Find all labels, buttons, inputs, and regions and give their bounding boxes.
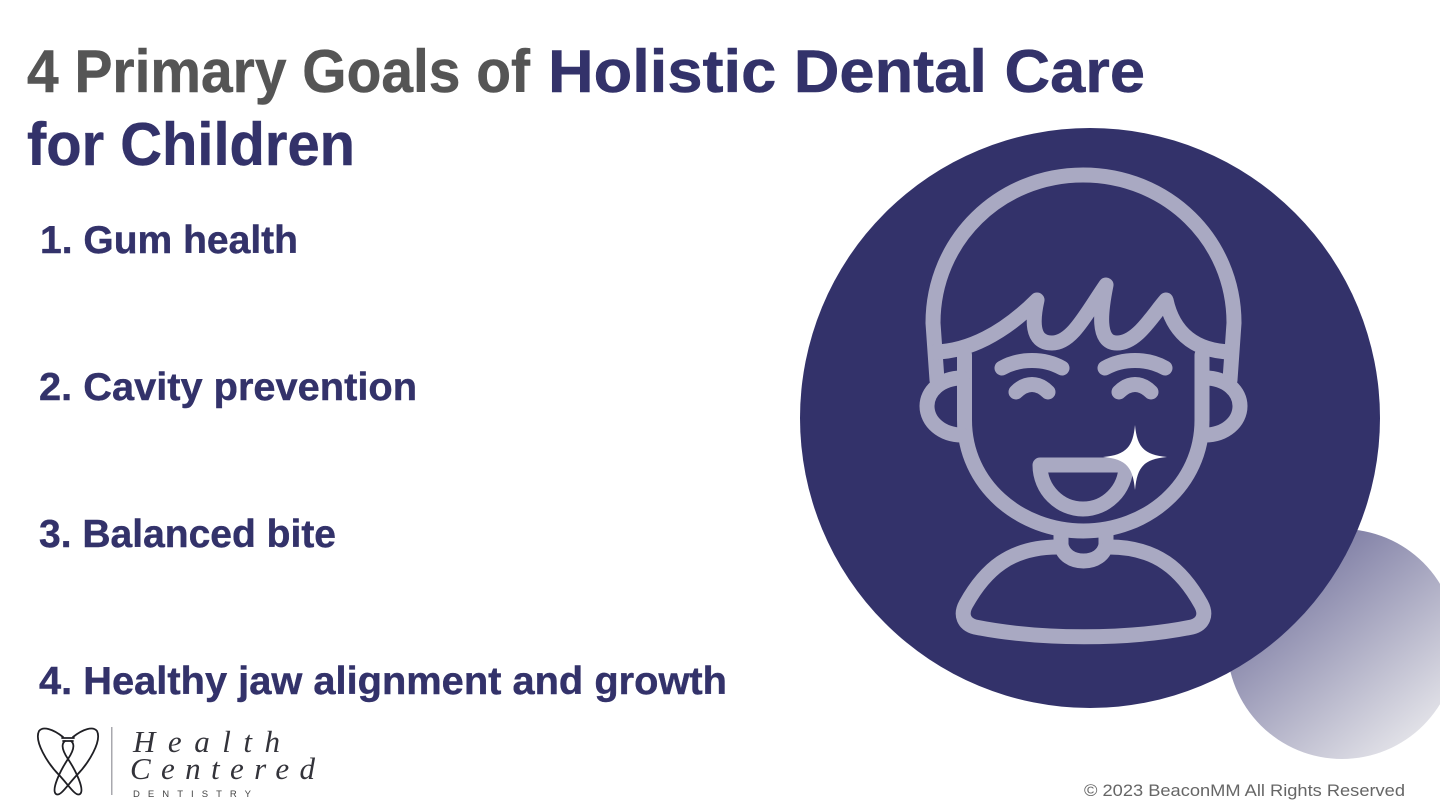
left brow — [1002, 360, 1062, 368]
right eye — [1119, 384, 1151, 392]
Health: Health — [132, 724, 280, 759]
decorative gradient circle — [1227, 529, 1440, 759]
goal 2: 2. Cavity prevention — [39, 366, 417, 409]
left eye — [1016, 384, 1048, 392]
title: 4 Primary Goals of — [27, 38, 531, 105]
head outline — [933, 175, 1234, 380]
Dentistry: DENTISTRY — [133, 789, 252, 800]
icon: sparkle — [1103, 425, 1167, 490]
right brow — [1105, 360, 1165, 368]
goal 1: 1. Gum health — [40, 219, 298, 262]
title — [27, 38, 1145, 178]
icon: smiling child — [927, 175, 1240, 637]
shoulders — [963, 547, 1204, 637]
copyright: © 2023 BeaconMM All Rights Reserved — [1084, 781, 1405, 800]
title: Holistic Dental Care — [548, 38, 1145, 105]
goal 4: 4. Healthy jaw alignment and growth — [39, 660, 727, 703]
mouth — [1040, 465, 1126, 509]
Centered: Centered — [130, 751, 316, 786]
logo wordmark — [130, 724, 316, 800]
title: for Children — [27, 111, 355, 178]
face — [964, 355, 1202, 531]
right ear — [1205, 378, 1240, 435]
logo: tooth ribbon mark — [38, 729, 98, 795]
goals list — [39, 219, 727, 703]
left ear — [927, 378, 962, 435]
large navy circle — [800, 128, 1380, 708]
goal 3: 3. Balanced bite — [39, 513, 336, 556]
collar — [1061, 535, 1106, 561]
logo divider — [111, 727, 112, 795]
hair fringe — [936, 285, 1231, 352]
